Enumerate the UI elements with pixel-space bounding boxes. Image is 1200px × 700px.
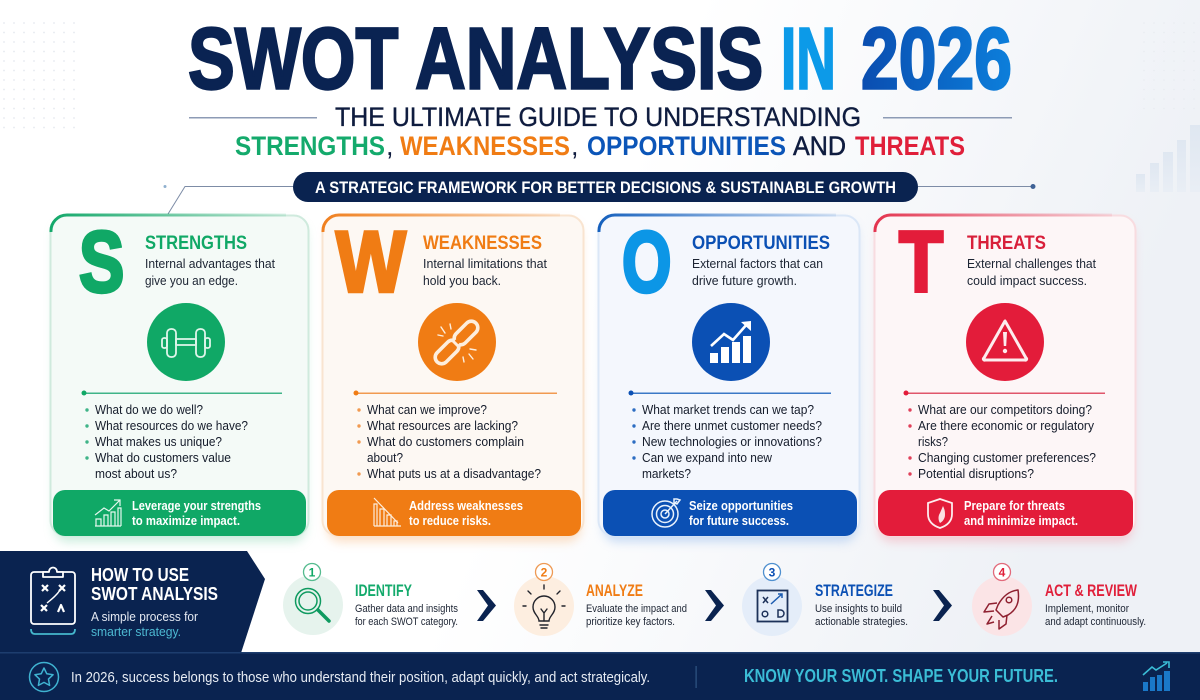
icon: growth chart: [1143, 662, 1170, 691]
call to action band: Seize opportunities: [689, 499, 793, 513]
call to action band: Leverage your strengths: [132, 499, 261, 513]
question list: [357, 403, 541, 481]
question list: risks?: [918, 435, 948, 449]
subtitle: four categories: ,: [571, 131, 579, 161]
description: [423, 257, 548, 288]
call to action band: to maximize impact.: [132, 514, 240, 528]
question list: about?: [367, 451, 403, 465]
panel: strengths: [50, 215, 308, 542]
icon: falling chart: [374, 498, 401, 526]
step 1: identify: IDENTIFY: [355, 581, 412, 600]
step 3: strategize: actionable strategies.: [815, 616, 908, 628]
decorative dot pattern right: [1135, 22, 1200, 112]
tagline pill: [293, 172, 918, 202]
question list: What do customers complain: [367, 435, 524, 449]
subtitle: four categories: THREATS: [855, 131, 965, 161]
description: [692, 257, 823, 288]
question list: [85, 403, 248, 481]
step 4: act and review: and adapt continuously.: [1045, 616, 1146, 628]
panel: threats: [874, 214, 1136, 542]
footer bar: [0, 652, 1200, 700]
icon: growth chart: [692, 303, 770, 381]
arrow 3: [933, 590, 952, 621]
divider: [82, 390, 282, 396]
heading: WEAKNESSES: [423, 233, 542, 254]
question list: What can we improve?: [367, 403, 487, 417]
question list: What resources are lacking?: [367, 419, 518, 433]
subtitle: four categories: OPPORTUNITIES: [587, 131, 786, 161]
subtitle: four categories: AND: [793, 131, 846, 161]
step 4: act and review: ACT & REVIEW: [1045, 581, 1138, 600]
big letter T: T: [899, 214, 943, 310]
big letter S: S: [79, 215, 124, 310]
step number: 2: [541, 566, 548, 580]
icon: clipboard playbook: [31, 568, 75, 634]
description: hold you back.: [423, 274, 501, 288]
icon: star badge: [30, 662, 58, 692]
step 1: identify: [283, 564, 458, 635]
description: drive future growth.: [692, 274, 797, 288]
step number: [536, 564, 552, 580]
description: Internal advantages that: [145, 257, 276, 271]
icon: warning triangle: [966, 303, 1044, 381]
step 3: strategize: Use insights to build: [815, 603, 902, 615]
step number: 4: [999, 566, 1006, 580]
subtitle: four categories: STRENGTHS: [235, 131, 385, 161]
panel: weaknesses: [322, 213, 584, 542]
tagline connector lines: [164, 184, 1036, 214]
call to action band: for future success.: [689, 514, 789, 528]
description: [145, 257, 276, 288]
question list: What resources do we have?: [95, 419, 248, 433]
step 1: identify: Gather data and insights: [355, 603, 458, 615]
icon: rocket: [984, 590, 1019, 629]
step 3: strategize: STRATEGIZE: [815, 581, 893, 600]
step number: [304, 564, 320, 580]
description: Internal limitations that: [423, 257, 548, 271]
description: External challenges that: [967, 257, 1097, 271]
step 2: analyze: Evaluate the impact and: [586, 603, 687, 615]
tagline pill: A STRATEGIC FRAMEWORK FOR BETTER DECISIONS & SUSTAINABLE GROWTH: [315, 178, 896, 197]
step number: [764, 564, 780, 580]
question list: Are there unmet customer needs?: [642, 419, 822, 433]
panel: how to use: [0, 551, 265, 653]
step 3: strategize: [742, 564, 908, 636]
step number: 1: [309, 566, 316, 580]
title: IN: [781, 11, 836, 108]
description: could impact success.: [967, 274, 1087, 288]
call to action band: [878, 490, 1133, 536]
icon: light bulb: [523, 585, 565, 628]
question list: [908, 403, 1096, 481]
heading: OPPORTUNITIES: [692, 233, 830, 254]
heading: THREATS: [967, 233, 1046, 254]
panel: opportunities: [598, 215, 860, 542]
heading: STRENGTHS: [145, 233, 247, 254]
description: External factors that can: [692, 257, 823, 271]
icon: dumbbell: [147, 303, 225, 381]
decorative faint bar chart: [1136, 125, 1200, 192]
question list: What makes us unique?: [95, 435, 222, 449]
question list: What are our competitors doing?: [918, 403, 1092, 417]
icon: magnifier: [296, 588, 329, 621]
panel: how to use: A simple process for: [91, 609, 199, 624]
call to action band: and minimize impact.: [964, 514, 1078, 528]
subtitle: THE ULTIMATE GUIDE TO UNDERSTANDING: [335, 102, 861, 132]
question list: most about us?: [95, 467, 177, 481]
call to action band: [603, 490, 857, 536]
call to action band: to reduce risks.: [409, 514, 491, 528]
step 1: identify: for each SWOT category.: [355, 616, 458, 628]
step 2: analyze: prioritize key factors.: [586, 616, 675, 628]
call to action band: Address weaknesses: [409, 499, 523, 513]
question list: [632, 403, 822, 481]
big letter O: O: [622, 215, 672, 311]
subtitle: four categories: [235, 131, 965, 161]
description: [967, 257, 1097, 288]
footer slogan: KNOW YOUR SWOT. SHAPE YOUR FUTURE.: [744, 666, 1058, 686]
divider: [628, 390, 831, 396]
icon: strategy board: [758, 590, 788, 622]
question list: Can we expand into new: [642, 451, 773, 465]
description: give you an edge.: [145, 274, 238, 288]
call to action band: Prepare for threats: [964, 499, 1065, 513]
subtitle: four categories: WEAKNESSES: [400, 131, 570, 161]
step number: 3: [769, 566, 776, 580]
icon: broken chain: [418, 303, 496, 381]
question list: Potential disruptions?: [918, 467, 1034, 481]
call to action band: [327, 490, 581, 536]
title: [188, 9, 1012, 108]
question list: What do customers value: [95, 451, 231, 465]
question list: What do we do well?: [95, 403, 203, 417]
icon: target: [652, 499, 680, 527]
question list: Changing customer preferences?: [918, 451, 1096, 465]
arrow 2: [705, 590, 724, 621]
panel: how to use: SWOT ANALYSIS: [91, 584, 218, 604]
subtitle: four categories: ,: [386, 131, 394, 161]
step 2: analyze: [514, 564, 687, 636]
title: 2026: [861, 9, 1012, 107]
step number: [994, 564, 1010, 580]
title: SWOT ANALYSIS: [188, 9, 763, 107]
divider: [904, 390, 1105, 396]
step 4: act and review: [972, 564, 1146, 636]
icon: rising chart: [95, 500, 121, 526]
panel: how to use: HOW TO USE: [91, 565, 189, 585]
big letter W: W: [336, 213, 406, 310]
question list: What puts us at a disadvantage?: [367, 467, 541, 481]
decorative dot pattern: [0, 20, 78, 132]
question list: Are there economic or regulatory: [918, 419, 1095, 433]
icon: shield: [928, 499, 952, 528]
step 2: analyze: ANALYZE: [586, 581, 643, 600]
question list: New technologies or innovations?: [642, 435, 822, 449]
step 4: act and review: Implement, monitor: [1045, 603, 1129, 615]
question list: What market trends can we tap?: [642, 403, 814, 417]
arrow 1: [477, 590, 496, 621]
question list: markets?: [642, 467, 691, 481]
panel: how to use: smarter strategy.: [91, 624, 181, 639]
divider: [354, 390, 557, 396]
footer statement: In 2026, success belongs to those who understand their position, adapt quickly, and act strategicaly.: [71, 670, 650, 686]
call to action band: [53, 490, 306, 536]
